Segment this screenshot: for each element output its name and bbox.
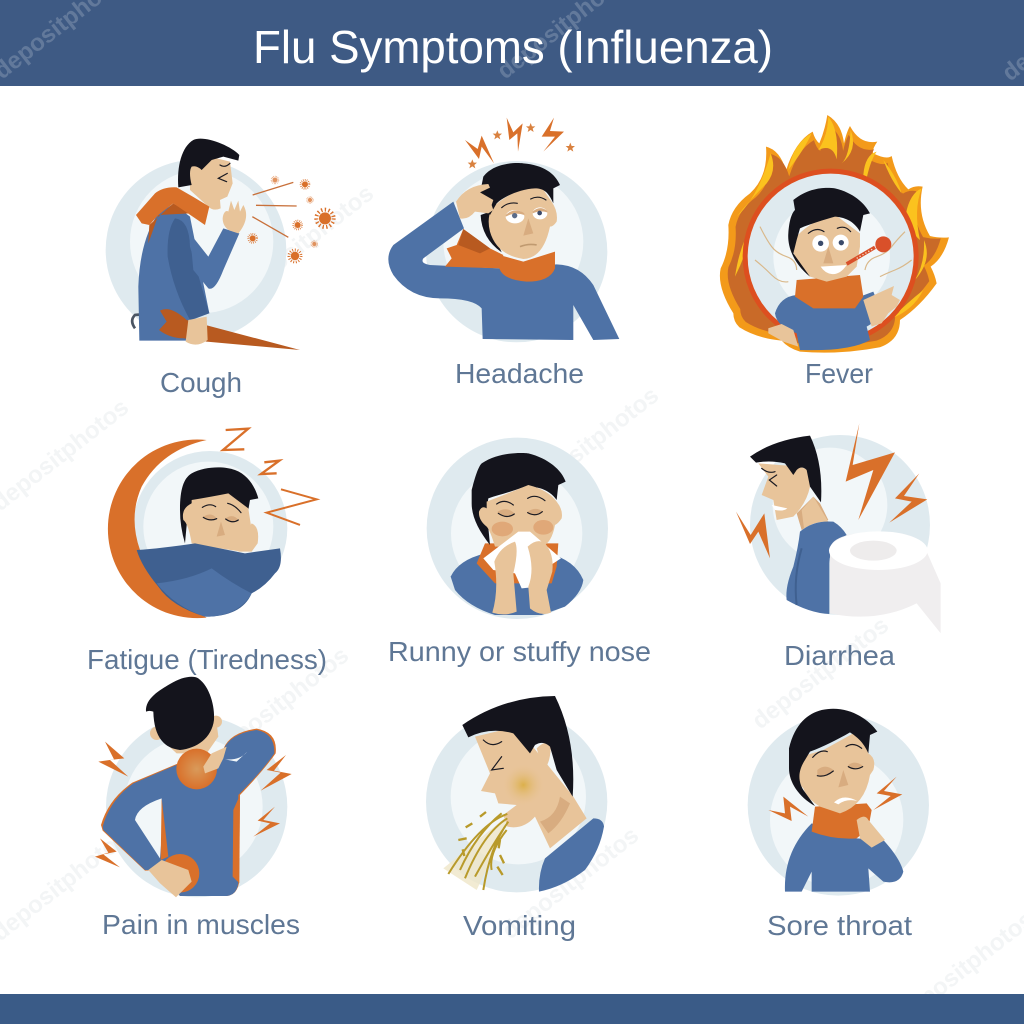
icon: muscle pain [95, 677, 292, 897]
footer bar [0, 994, 1024, 1024]
icon: diarrhea [736, 423, 941, 633]
icon: sore throat [748, 709, 929, 896]
header bar [0, 0, 1024, 87]
watermark text: depositphotos [517, 382, 664, 505]
label: headache: Headache [455, 358, 584, 389]
label: runny nose: Runny or stuffy nose [388, 636, 651, 667]
label: diarrhea: Diarrhea [784, 640, 895, 671]
watermark text: depositphotos [207, 642, 354, 765]
icon: fatigue [108, 429, 317, 618]
label: sore throat: Sore throat [767, 910, 912, 941]
icon: fever [720, 115, 949, 353]
watermark text: depositphotos [232, 180, 379, 303]
title: Flu Symptoms (Influenza) [253, 21, 773, 73]
icon: cough [106, 139, 334, 350]
watermark text: depositphotos [497, 822, 644, 945]
label: muscle pain: Pain in muscles [102, 909, 300, 940]
label: fever: Fever [805, 358, 873, 389]
icon: headache [388, 118, 619, 342]
label: cough: Cough [160, 367, 242, 398]
icon: vomiting [426, 696, 607, 892]
label: fatigue: Fatigue (Tiredness) [87, 644, 327, 675]
label: vomiting: Vomiting [463, 910, 576, 941]
icon: runny nose [427, 438, 608, 619]
watermark text: depositphotos [747, 612, 894, 735]
